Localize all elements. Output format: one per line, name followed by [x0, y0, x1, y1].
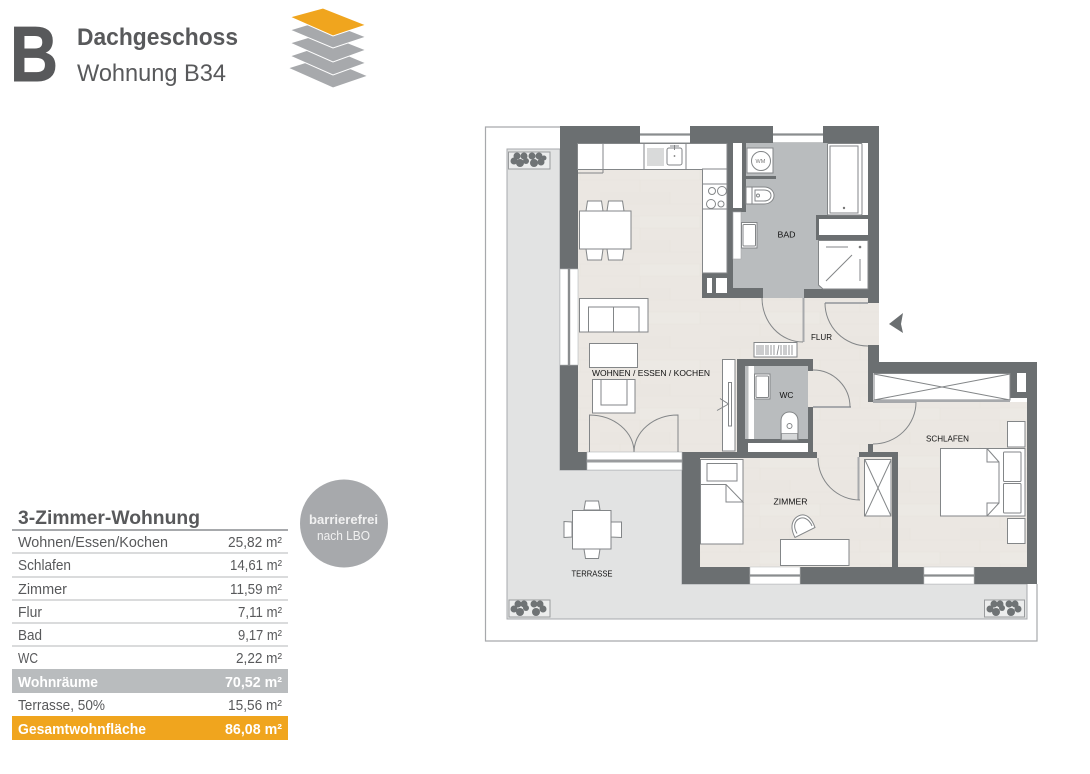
shower: [818, 240, 868, 289]
row: Gesamtwohnfläche: Gesamtwohnfläche: [18, 722, 146, 738]
row: WC: [18, 651, 282, 667]
room labels: ZIMMER: [774, 496, 808, 506]
row: Zimmer: [18, 582, 282, 598]
planter: top left: [508, 152, 550, 169]
floor plan: [486, 126, 1037, 641]
terrace table: [564, 501, 622, 558]
row: Wohnen/Essen/Kochen: [18, 535, 282, 551]
row: Terrasse: 15,56 m²: [228, 698, 282, 714]
row: Gesamtwohnfläche: [12, 716, 288, 740]
badge: barrierefrei: barrierefrei: [309, 512, 378, 527]
sink grate: [647, 148, 664, 166]
table title: 3-Zimmer-Wohnung: [18, 508, 200, 529]
bathroom fixtures: [733, 143, 868, 289]
shoe rack: [754, 342, 797, 357]
room furniture: [700, 460, 849, 566]
row: Flur: Flur: [18, 605, 42, 621]
row: WC: WC: [18, 651, 38, 667]
kitchen: [578, 143, 727, 293]
row: Schlafen: [18, 558, 282, 574]
room labels: WC: [780, 390, 794, 400]
row: Zimmer: Zimmer: [18, 582, 67, 598]
shaft: [819, 219, 868, 235]
row: Wohnen/Essen/Kochen: 25,82 m²: [228, 535, 282, 551]
sliding door: [717, 360, 735, 451]
terrace surface: [507, 149, 1027, 619]
row: Wohnräume: 70,52 m²: [225, 675, 282, 691]
row: Flur: 7,11 m²: [238, 605, 282, 621]
bath toilet: [746, 187, 774, 204]
WC fixtures: [748, 366, 808, 452]
badge: barrierefrei: nach LBO: [317, 528, 370, 543]
bathroom floor: [733, 143, 868, 298]
icon: entrance arrow: [889, 313, 903, 333]
windows: [560, 126, 974, 584]
living furniture: [580, 298, 648, 413]
row: Wohnräume: [12, 669, 288, 693]
planter: bottom left: [509, 600, 550, 617]
room labels: [572, 230, 969, 578]
hob: [708, 188, 716, 194]
walls: [560, 126, 1037, 584]
row: Bad: 9,17 m²: [238, 628, 282, 644]
row: Bad: Bad: [18, 628, 42, 644]
plot boundary: [486, 127, 1037, 641]
bathtub: [862, 143, 868, 215]
area table: [12, 508, 288, 740]
row: Flur: [18, 605, 282, 621]
room labels: WOHNEN / ESSEN / KOCHEN: [592, 368, 710, 378]
badge: barrierefrei: [300, 480, 388, 568]
bedroom furniture: [940, 422, 1025, 544]
room labels: BAD: [778, 230, 796, 240]
row: Zimmer: 11,59 m²: [230, 582, 282, 598]
terrace doors: [590, 415, 678, 452]
row: Gesamtwohnfläche: 86,08 m²: [225, 722, 282, 738]
room labels: SCHLAFEN: [926, 434, 969, 444]
bathroom fixtures: WM: [756, 159, 766, 165]
row: Schlafen: 14,61 m²: [230, 558, 282, 574]
WC floor: [745, 366, 808, 440]
planter: bottom right: [984, 600, 1024, 617]
row: Wohnen/Essen/Kochen: Wohnen/Essen/Kochen: [18, 535, 168, 551]
row: Terrasse: Terrasse, 50%: [18, 698, 105, 714]
building letter: B: [10, 10, 58, 98]
icon: floor stack: [288, 8, 368, 88]
header: [10, 10, 238, 98]
row: WC: 2,22 m²: [236, 651, 282, 667]
room labels: FLUR: [811, 332, 832, 342]
dining table: [580, 201, 631, 260]
row: Wohnräume: Wohnräume: [18, 675, 98, 691]
row: Schlafen: Schlafen: [18, 558, 71, 574]
apartment number: Wohnung B34: [77, 60, 226, 87]
wardrobes and closet: [864, 373, 1026, 516]
doors: [762, 298, 916, 500]
row: Terrasse: [18, 698, 282, 714]
floor heading: Dachgeschoss: [77, 24, 238, 51]
washing machine: [747, 148, 773, 173]
room labels: TERRASSE: [572, 568, 613, 578]
apartment floor: [578, 169, 1027, 567]
row: Bad: [18, 628, 282, 644]
bath sink: [742, 222, 757, 248]
